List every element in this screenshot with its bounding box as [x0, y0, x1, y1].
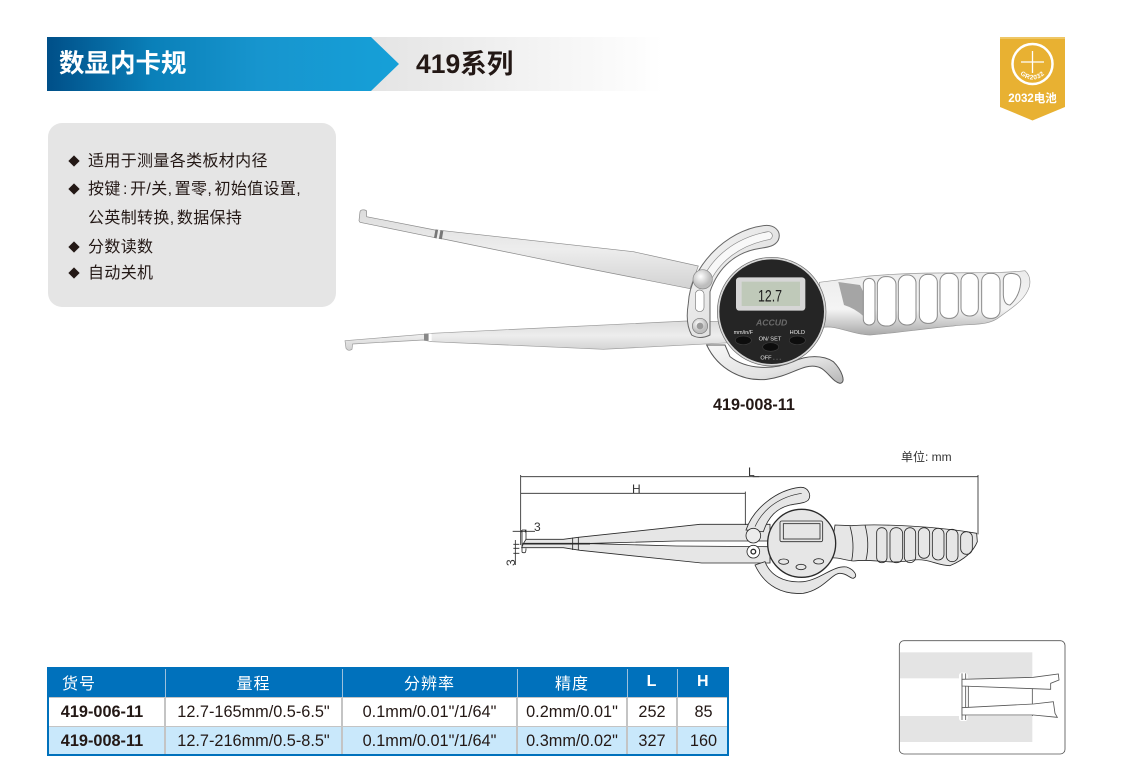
dimension labels: L: [748, 465, 755, 479]
buttons: [735, 336, 805, 351]
series heading: 419系列: [416, 49, 513, 79]
specification table: L: [647, 673, 657, 690]
dimension labels: [504, 449, 952, 566]
specification table: 419-008-11: [61, 732, 143, 750]
feature list: [68, 152, 301, 282]
panel: features: [48, 123, 336, 307]
pivot screw: [692, 318, 708, 334]
upper slotted arc: [687, 225, 779, 337]
dial, arc and handle: [687, 225, 1030, 383]
specification table: 160: [690, 732, 717, 750]
caliper arms: [345, 210, 730, 350]
title: 数显内卡规: [59, 50, 187, 78]
dimension labels: 3: [534, 520, 541, 534]
feature list: 适用于测量各类板材内径: [88, 153, 268, 170]
dimension labels: H: [632, 482, 641, 496]
digital dial: [717, 257, 826, 366]
feature list: 分数读数: [88, 239, 153, 256]
diagram frame: [899, 641, 1065, 754]
adjustment knob: [693, 270, 712, 289]
digital dial: HOLD: [790, 330, 805, 336]
specification table: 0.2mm/0.01": [526, 703, 618, 721]
specification table: 0.1mm/0.01"/1/64": [363, 703, 496, 721]
specification table: 精度: [555, 676, 589, 693]
icon: 2032 battery badge: 2032电池: [1008, 91, 1057, 105]
specification table: 12.7-216mm/0.5-8.5": [177, 732, 330, 750]
digital dial: 12.7: [758, 287, 782, 306]
dimension drawing: [504, 449, 978, 594]
lower hook arc: [707, 345, 843, 383]
right part: dial outline and L dimension: [746, 475, 978, 594]
panel background: [48, 123, 336, 307]
specification table: 货号: [62, 676, 96, 693]
specification table: 0.3mm/0.02": [526, 732, 618, 750]
digital dial: ON/ SET: [759, 337, 782, 343]
icon: 2032 battery badge: [1000, 37, 1065, 120]
specification table: 量程: [236, 676, 270, 693]
handle: [819, 271, 1030, 335]
specification table: 0.1mm/0.01"/1/64": [363, 732, 496, 750]
table outline: [47, 667, 729, 756]
workpiece: [900, 652, 1032, 678]
product photo: digital inside caliper: [344, 210, 1030, 384]
header banner: [47, 37, 576, 91]
dimension labels: 3: [504, 559, 518, 566]
dimension labels: 单位: mm: [901, 449, 952, 464]
specification table: 327: [638, 732, 666, 750]
specification table: 252: [638, 703, 666, 721]
digital dial: mm/in/F: [734, 330, 754, 336]
digital dial: OFF . . .: [760, 355, 781, 361]
specification table: 419-006-11: [61, 703, 143, 721]
feature list: 按键 : 开/关, 置零, 初始值设置,: [88, 181, 301, 198]
specification table: 分辨率: [404, 676, 455, 693]
icon: 2032 battery badge: GR2032: [1021, 72, 1044, 80]
specification table: 12.7-165mm/0.5-6.5": [177, 703, 330, 721]
feature list: 自动关机: [88, 265, 153, 282]
specification table: [49, 669, 727, 754]
specification table: H: [697, 673, 710, 690]
banner shapes: [47, 37, 576, 91]
drawing handle: [830, 525, 977, 566]
caliper in bore: [959, 673, 1059, 721]
LCD display: [736, 277, 805, 311]
brand: ACCUD: [755, 317, 787, 327]
model label: 419-008-11: [713, 396, 795, 414]
left part: jaws and H dimension: [513, 475, 770, 565]
feature list: 公英制转换, 数据保持: [88, 210, 242, 227]
specification table: 85: [694, 703, 713, 721]
